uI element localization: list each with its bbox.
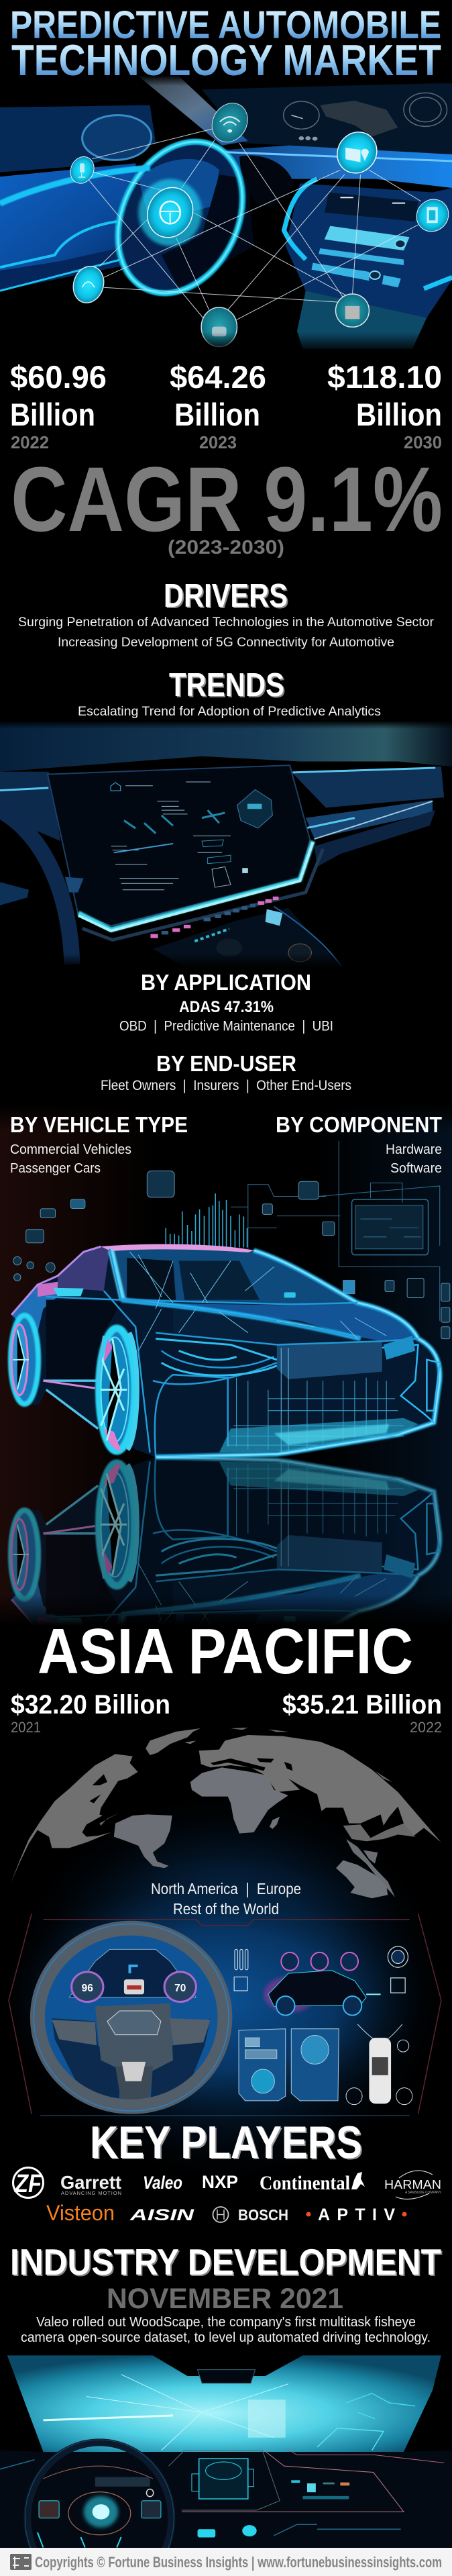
development description: camera open-source dataset, to level up automated driving technology.: [21, 2330, 431, 2345]
component segments: Hardware: [386, 1142, 442, 1157]
CAGR figure: (2023-2030): [168, 537, 284, 558]
stat: 2030 market size: [327, 359, 442, 452]
development description: Valeo rolled out WoodScape, the company's first multitask fisheye: [36, 2314, 416, 2330]
floating icons: [13, 1171, 450, 1339]
front wheel: [98, 1327, 137, 1452]
drivers text: Surging Penetration of Advanced Technologies in the Automotive Sector: [18, 615, 434, 630]
logo: Bosch: BOSCH: [238, 2206, 288, 2224]
logo: Aisin: AISIN: [129, 2206, 194, 2224]
glow behind globe: [3, 1785, 452, 2188]
steering wheel: 70: [174, 1983, 186, 1994]
stat: Asia Pacific 2022: $35.21 Billion: [282, 1690, 442, 1720]
vehicle type segments: Commercial Vehicles: [10, 1142, 131, 1157]
drivers heading: DRIVERS: [165, 579, 289, 615]
title: [10, 3, 441, 85]
stat: 2022 market size: [10, 359, 107, 452]
rear wheel: [10, 1315, 39, 1405]
node: chip: [336, 294, 369, 327]
stat: Asia Pacific 2021: [11, 1690, 170, 1736]
logo: ZF: ZF: [14, 2170, 43, 2198]
component segments: Software: [390, 1161, 442, 1176]
hero image: connected car cockpit: [0, 76, 452, 349]
sliders and controls: [234, 1946, 408, 1993]
logo: Harman: A SAMSUNG COMPANY: [405, 2191, 442, 2195]
network connection lines: [88, 129, 421, 320]
ambient light strips: [0, 152, 452, 291]
logo: Bosch: [213, 2206, 288, 2224]
smart cockpit interface image: [0, 1869, 441, 2132]
other regions: Rest of the World: [173, 1900, 279, 1918]
blueprint car image: [0, 1104, 452, 1670]
dashboard display image: [0, 721, 452, 967]
HUD frame: [9, 1914, 441, 2114]
stat: 2023 market size: $64.26: [170, 359, 266, 395]
logo: Harman: [384, 2171, 442, 2199]
logo: Continental: Continental: [260, 2172, 350, 2194]
trends text: Escalating Trend for Adoption of Predictive Analytics: [78, 704, 381, 719]
stat: 2023 market size: Billion: [174, 397, 260, 432]
steering wheel: [33, 1924, 229, 2111]
key players heading: KEY PLAYERS: [90, 2117, 362, 2168]
development date: NOVEMBER 2021: [107, 2283, 343, 2315]
car reflection: [10, 1457, 440, 1670]
dashboard vents and radio screen: [311, 193, 418, 287]
logo: NXP: NXP: [202, 2172, 238, 2192]
component segments: [386, 1142, 442, 1176]
data panels: [239, 2029, 339, 2101]
drivers text: [18, 615, 434, 650]
logo: Garrett: ADVANCING MOTION: [61, 2190, 121, 2196]
side mirror: [80, 113, 154, 162]
logo: Valeo: Valeo: [143, 2173, 182, 2193]
key players heading: KEY PLAYERS: [91, 2118, 363, 2169]
ADAS share: ADAS 47.31%: [179, 998, 274, 1016]
futuristic windshield image: [0, 2355, 452, 2576]
touchscreen: [48, 765, 310, 926]
application segments: OBD | Predictive Maintenance | UBI: [119, 1019, 333, 1034]
by application heading: BY APPLICATION: [141, 970, 311, 995]
console buttons: [198, 2525, 257, 2537]
drivers text: Increasing Development of 5G Connectivity for Automotive: [58, 635, 394, 650]
glowing trim: [78, 841, 323, 940]
centre console: [153, 907, 342, 967]
steering wheel arc: [0, 810, 72, 964]
stat: 2023 market size: 2023: [199, 432, 237, 452]
footer bar: [0, 2548, 452, 2576]
logo: Harman: HARMAN: [384, 2178, 441, 2191]
steering wheel: 96: [82, 1983, 93, 1994]
top-view car: [346, 2024, 412, 2105]
by component heading: BY COMPONENT: [276, 1112, 442, 1137]
mesh detail: [130, 1252, 386, 1452]
logo: Visteon: Visteon: [46, 2201, 115, 2225]
stat: Asia Pacific 2021: $32.20 Billion: [11, 1690, 170, 1720]
by end-user heading: BY END-USER: [156, 1051, 296, 1076]
vehicle type segments: Passenger Cars: [10, 1161, 101, 1176]
car wireframe: [10, 1244, 440, 1457]
stat: Asia Pacific 2021: 2021: [11, 1719, 41, 1736]
node: navigation map: [334, 130, 380, 175]
stat: 2030 market size: Billion: [356, 397, 442, 432]
data bars above roof: [166, 1193, 247, 1247]
stat: 2030 market size: 2030: [404, 432, 442, 452]
stat: 2023 market size: [170, 359, 266, 452]
drivers heading: DRIVERS: [164, 578, 288, 614]
node: wifi: [208, 101, 252, 144]
stat: 2022 market size: Billion: [10, 397, 95, 432]
trends heading: TRENDS: [169, 667, 284, 703]
floating interface tablet: [231, 1141, 440, 1321]
centre screen: [192, 2459, 253, 2499]
trends heading: TRENDS: [170, 668, 286, 705]
right dash readouts: [291, 2480, 349, 2499]
node: microphone: [68, 155, 97, 185]
development description: [21, 2314, 431, 2345]
light strips: [0, 768, 435, 839]
other regions: North America | Europe: [151, 1880, 301, 1897]
logo: Garrett: Garrett: [60, 2172, 121, 2193]
stat: 2030 market size: $118.10: [327, 359, 442, 395]
dashboard: [0, 2450, 452, 2548]
windshield view: [7, 2355, 441, 2452]
vehicle type segments: [10, 1142, 131, 1176]
stat: 2022 market size: 2022: [11, 432, 49, 452]
steering wheel ring: [99, 132, 262, 303]
button row: [150, 897, 278, 938]
stat: Asia Pacific 2022: [282, 1690, 442, 1736]
stat: 2022 market size: $60.96: [10, 359, 107, 395]
node: vehicle: [201, 307, 237, 347]
Fortune Business Insights logo: [10, 2554, 32, 2570]
asia pacific heading: ASIA PACIFIC: [38, 1616, 413, 1687]
globe map: [11, 1728, 441, 1898]
steering wheel: [25, 2440, 174, 2576]
node: central driver assist: [138, 179, 202, 246]
stat: Asia Pacific 2022: 2022: [410, 1719, 442, 1736]
by vehicle type heading: BY VEHICLE TYPE: [10, 1112, 188, 1137]
end-user segments: Fleet Owners | Insurers | Other End-Users: [101, 1078, 351, 1093]
concept vehicle: [264, 1952, 381, 2016]
node: battery: [414, 198, 451, 233]
node: speedometer: [70, 264, 107, 304]
logo: Aptiv: APTIV: [318, 2206, 395, 2224]
faint instrument cluster: [284, 93, 447, 129]
dash outlines: [0, 2448, 444, 2536]
other regions: [151, 1880, 301, 1918]
